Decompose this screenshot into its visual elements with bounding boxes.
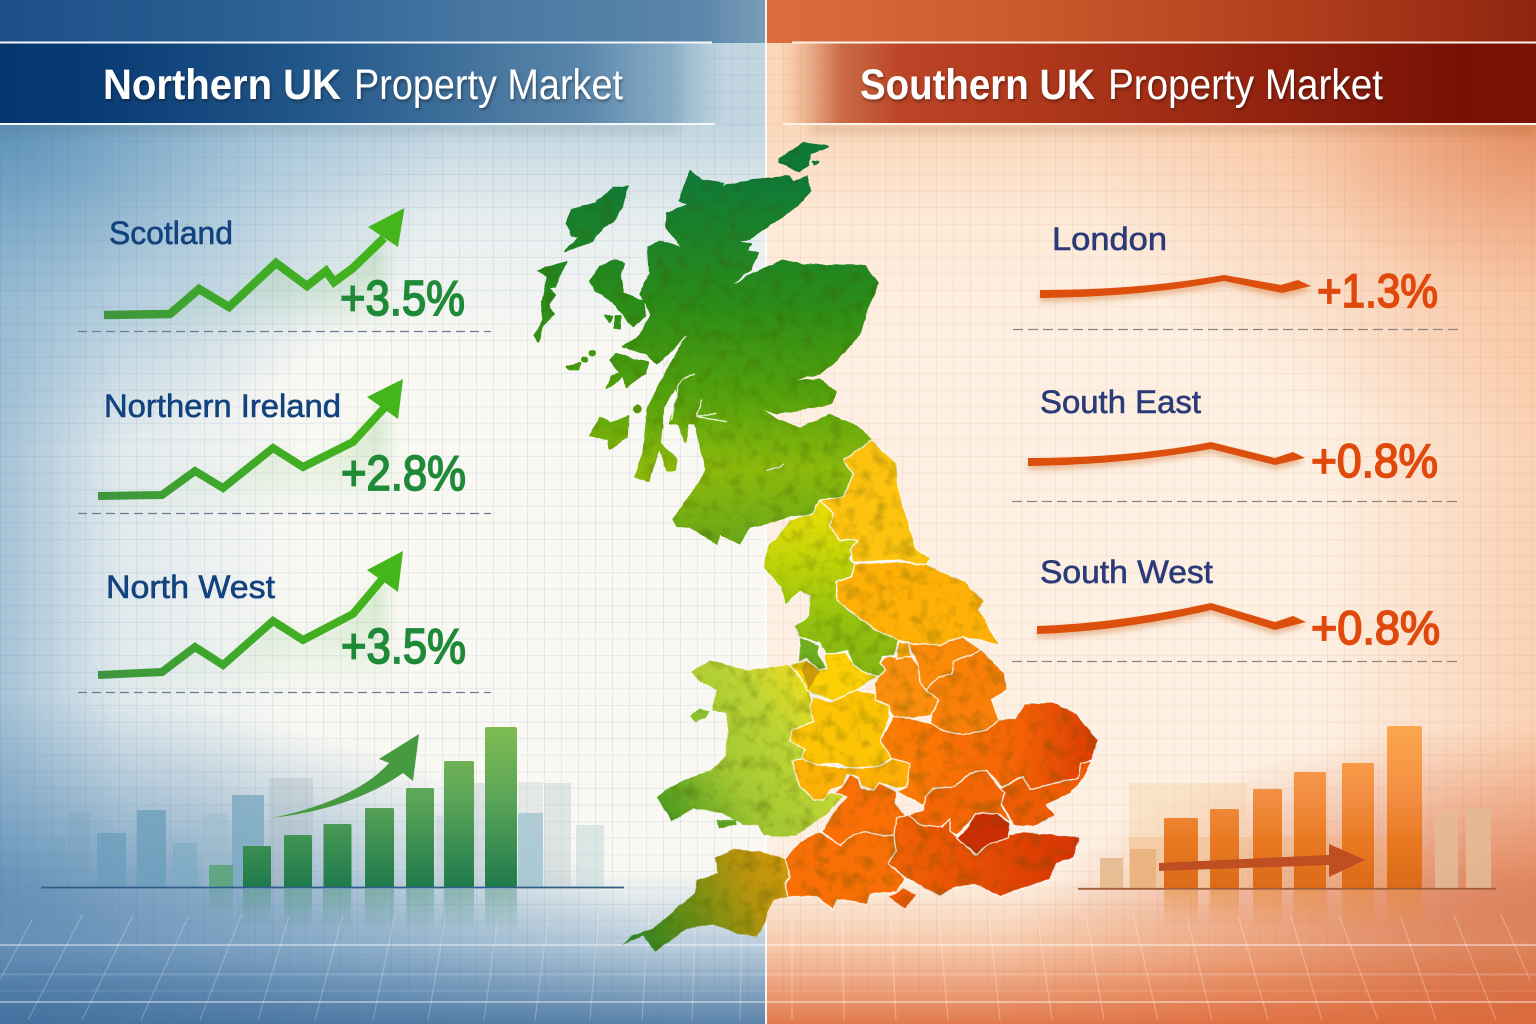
region: Lincolnshire bbox=[908, 637, 982, 690]
region: Dorset and Somerset bbox=[785, 832, 905, 910]
reflections bbox=[1164, 890, 1422, 934]
row: Scotland +3.5% bbox=[78, 208, 491, 332]
heading: southern: Southern UK bbox=[860, 61, 1095, 109]
row: Scotland +3.5%: Scotland bbox=[109, 215, 233, 251]
region: Yorkshire bbox=[837, 562, 1000, 645]
heading: southern bbox=[860, 61, 1383, 109]
row: London +1.3%: +1.3% bbox=[1317, 264, 1438, 317]
bar chart: south flat bbox=[1078, 726, 1496, 934]
row: South East +0.8%: +0.8% bbox=[1311, 434, 1438, 487]
reflections bbox=[209, 889, 517, 931]
map: England and Wales regions bbox=[622, 440, 1098, 952]
region: Wales bbox=[657, 660, 845, 837]
row: Northern Ireland +2.8%: Northern Ireland bbox=[104, 388, 341, 424]
axis bbox=[1078, 888, 1496, 890]
region: London bbox=[957, 813, 1010, 855]
row: Northern Ireland +2.8% bbox=[78, 379, 491, 514]
green bars bbox=[243, 727, 517, 887]
bar chart: north rising bbox=[41, 727, 624, 931]
region: East Anglia bbox=[880, 702, 1098, 805]
heading: southern: Property Market bbox=[1108, 61, 1383, 109]
panel: southern regions bbox=[1012, 221, 1460, 662]
panel: southern header bbox=[780, 42, 1536, 132]
row: London +1.3% bbox=[1013, 221, 1460, 330]
centre divider bbox=[765, 0, 767, 1024]
panel background: northern blue bbox=[0, 0, 766, 1024]
heading: northern: Property Market bbox=[354, 61, 623, 109]
axis bbox=[41, 886, 624, 888]
region: North East bbox=[820, 440, 930, 565]
region: Shropshire yellow bbox=[790, 652, 878, 702]
panel background: southern orange bbox=[766, 0, 1536, 1024]
map: Scotland and islands bbox=[535, 143, 878, 543]
row: Scotland +3.5%: +3.5% bbox=[340, 272, 465, 326]
region: North West bbox=[763, 500, 898, 677]
heading: northern: Northern UK bbox=[103, 61, 341, 109]
region: Norfolk west bbox=[927, 650, 1007, 735]
row: South West +0.8% bbox=[1012, 554, 1460, 662]
region: Merseyside bbox=[798, 637, 827, 670]
panel: northern regions bbox=[78, 208, 491, 692]
region: Essex bbox=[1000, 760, 1092, 827]
arrow: rising trend bbox=[272, 734, 419, 818]
region: Isle of Wight bbox=[889, 888, 916, 908]
region: Sussex and Surrey bbox=[888, 815, 1080, 897]
row: South East +0.8% bbox=[1012, 384, 1460, 502]
row: North West +3.5%: +3.5% bbox=[341, 620, 466, 674]
row: London +1.3%: London bbox=[1052, 221, 1167, 257]
row: North West +3.5%: North West bbox=[106, 569, 275, 605]
region: East Midlands bbox=[875, 655, 938, 718]
row: South East +0.8%: South East bbox=[1040, 384, 1201, 420]
row: South West +0.8%: South West bbox=[1040, 554, 1213, 590]
background bars bbox=[44, 778, 604, 887]
region: Cheshire brown bbox=[802, 660, 820, 690]
top band: north bbox=[0, 0, 766, 43]
region: West Midlands bbox=[790, 690, 892, 768]
arrow: flat trend bbox=[1159, 844, 1365, 877]
row: South West +0.8%: +0.8% bbox=[1311, 601, 1440, 654]
bottom perspective floor: north bbox=[0, 915, 765, 1020]
row: Northern Ireland +2.8%: +2.8% bbox=[341, 447, 466, 501]
row: North West +3.5% bbox=[78, 551, 491, 692]
panel: northern header bbox=[0, 42, 735, 132]
region: Thames bbox=[908, 770, 1012, 835]
region: Gloucester bbox=[822, 775, 907, 845]
region: Devon and Cornwall bbox=[622, 849, 790, 952]
background bars bbox=[1100, 783, 1491, 888]
orange bars bbox=[1164, 726, 1422, 888]
top band: south bbox=[766, 0, 1536, 43]
region: Cotswolds bbox=[792, 758, 910, 800]
bottom perspective floor: south bbox=[767, 915, 1536, 1020]
map of the UK bbox=[535, 143, 1098, 952]
heading: northern bbox=[103, 61, 623, 109]
